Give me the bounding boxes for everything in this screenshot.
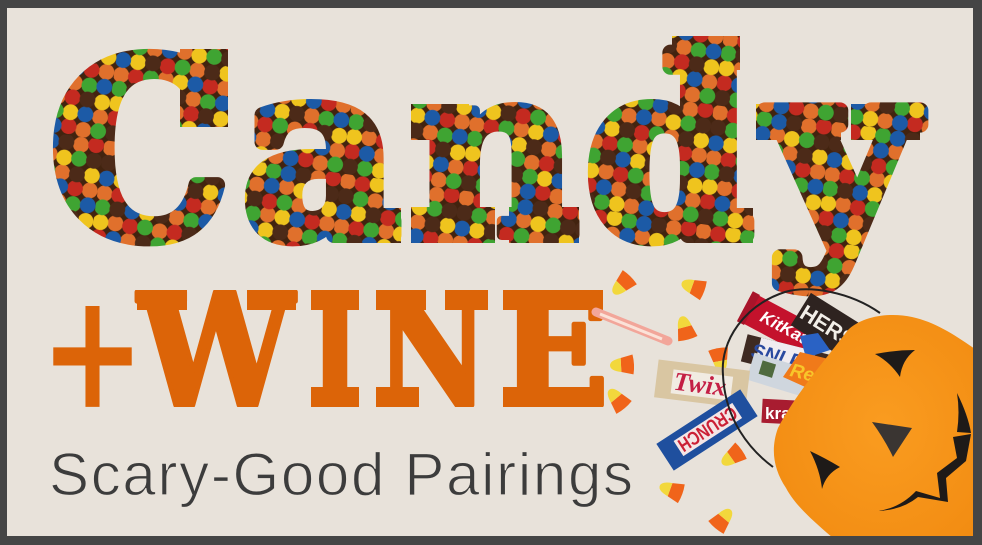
- right eye: [957, 393, 971, 433]
- title: Candy: a: [243, 10, 399, 292]
- candy bar: Reese's: Ree: [788, 360, 827, 389]
- title: Candy: n: [409, 10, 580, 292]
- candy bar: Crunch: [656, 389, 758, 471]
- candy bar: Crunch: CRUNCH: [674, 401, 740, 455]
- candy bar: Snickers: [740, 334, 829, 364]
- title: +WINE: +: [40, 256, 145, 445]
- title: +WINE: W: [136, 259, 296, 442]
- left lower eye: [810, 451, 840, 489]
- title: Candy: y: [764, 10, 921, 292]
- title: Candy: C: [51, 10, 229, 292]
- candy bar: Reese's: [783, 352, 826, 387]
- candy bar: Twix: Twix: [672, 367, 728, 402]
- taffy: [596, 312, 668, 341]
- candy bar: KitKat: [737, 291, 806, 348]
- candy bar: Twix: [654, 360, 750, 408]
- title: +WINE: I: [309, 259, 361, 442]
- title: Candy: [51, 10, 921, 292]
- candy bar: Hershey's: HERS: [796, 300, 860, 353]
- pail handle: [723, 289, 880, 467]
- candy bar: Krackel: [761, 398, 795, 424]
- candy bar: Snickers: SNI Ra: [749, 340, 817, 377]
- title: Candy: d: [586, 10, 752, 292]
- slab serifs: [180, 36, 920, 243]
- left upper eye: [875, 350, 915, 377]
- subtitle: Scary-Good Pairings: [49, 441, 633, 508]
- candy bar: Krackel: krack: [765, 404, 810, 423]
- title: +WINE: [53, 290, 604, 407]
- nose: [872, 422, 912, 457]
- candy bar: silver wrapper: [749, 352, 804, 396]
- title: +WINE: N: [375, 259, 489, 442]
- candy bar: blue wrapper: [800, 333, 830, 358]
- candy bar: KitKat: KitKat: [757, 307, 811, 348]
- icon: jack-o-lantern pail: [774, 315, 975, 538]
- icon: candy corn pieces: [602, 269, 748, 535]
- spilled candy: [596, 269, 975, 538]
- title: +WINE: E: [499, 259, 609, 442]
- slab serifs: [137, 290, 603, 407]
- mouth: [878, 434, 971, 511]
